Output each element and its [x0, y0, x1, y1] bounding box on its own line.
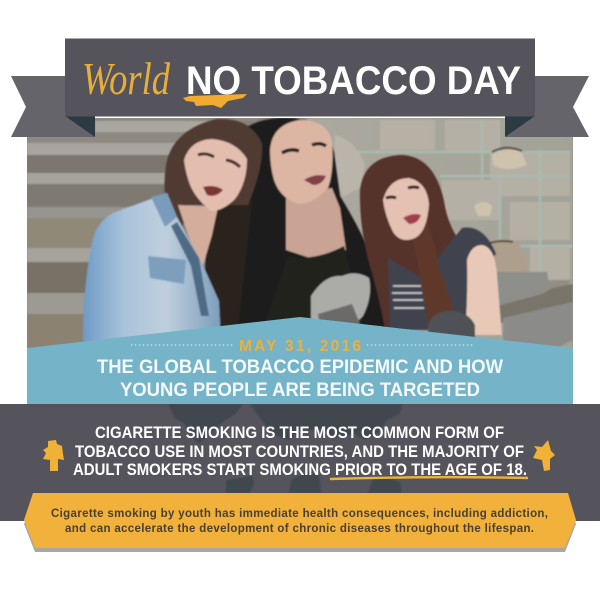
icon: right tobacco leaf	[533, 440, 555, 471]
blue title panel	[27, 317, 573, 404]
woman centre	[227, 118, 386, 327]
main statement: ADULT SMOKERS START SMOKING PRIOR TO THE AGE OF 18.	[73, 461, 527, 479]
panel heading	[97, 357, 503, 401]
title banner	[65, 38, 535, 116]
stone steps left	[27, 118, 308, 314]
shirt and print	[308, 246, 346, 261]
dotted rule right	[367, 344, 475, 346]
dotted rule left	[131, 344, 235, 346]
yellow callout: and can accelerate the development of chronic diseases throughout the lifespan.	[65, 523, 534, 535]
neck	[178, 205, 218, 269]
panel heading: YOUNG PEOPLE ARE BEING TARGETED	[120, 380, 480, 401]
arm	[465, 245, 502, 335]
date: MAY 31, 2016	[239, 338, 361, 355]
face	[383, 178, 429, 240]
right ribbon tail	[505, 76, 589, 137]
jacket	[83, 193, 221, 358]
yellow callout: Cigarette smoking by youth has immediate health consequences, including addiction,	[51, 508, 548, 520]
shirt	[388, 228, 496, 330]
NO TOBACCO DAY: NO TOBACCO DAY	[186, 59, 521, 103]
main statement: CIGARETTE SMOKING IS THE MOST COMMON FORM OF	[95, 424, 504, 442]
face	[184, 139, 247, 211]
highlight underline	[330, 477, 528, 479]
main statement: TOBACCO USE IN MOST COUNTRIES, AND THE MAJORITY OF	[75, 443, 524, 461]
panel heading: THE GLOBAL TOBACCO EPIDEMIC AND HOW	[97, 357, 503, 378]
icon: left tobacco leaf	[43, 440, 64, 471]
left ribbon tail	[11, 76, 95, 137]
World script: World	[82, 53, 171, 104]
chest	[286, 188, 346, 260]
woman right	[360, 155, 502, 339]
main statement	[73, 424, 527, 479]
woman left	[83, 119, 262, 358]
knee	[428, 311, 475, 339]
hair over shirt	[414, 226, 454, 325]
steps right	[497, 272, 573, 348]
world map	[168, 404, 403, 493]
photo: three young women on stone steps	[27, 118, 573, 358]
face	[270, 120, 332, 204]
brush underline	[183, 94, 247, 108]
yellow callout	[24, 493, 576, 552]
stone wall	[300, 118, 573, 350]
dark band	[0, 404, 600, 521]
